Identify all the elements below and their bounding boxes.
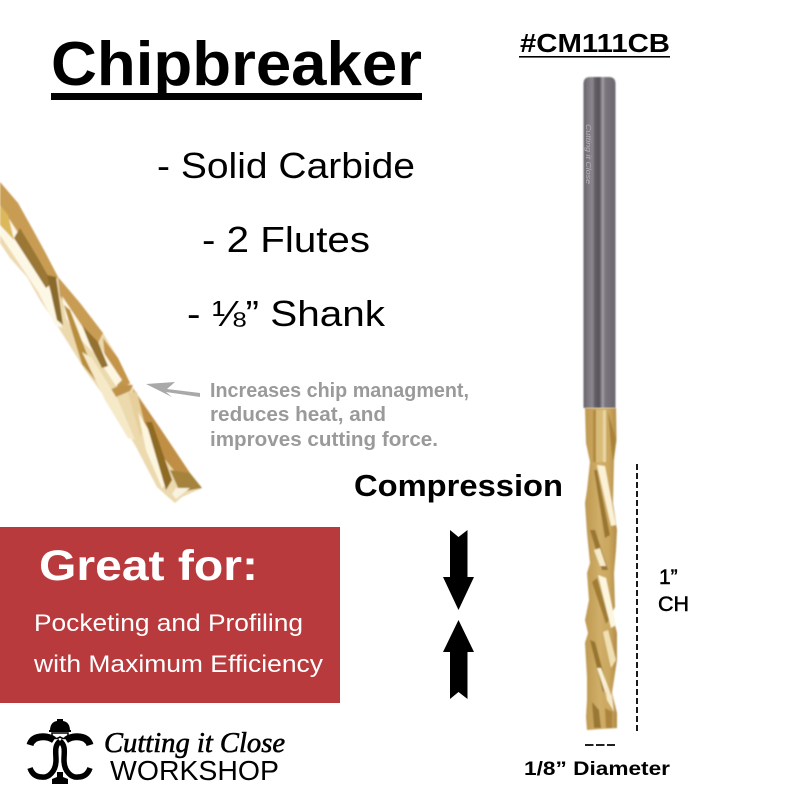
compression heading: Compression [354, 468, 563, 503]
product code: #CM111CB [520, 28, 670, 58]
cutting height label [658, 566, 689, 616]
compression arrows [443, 530, 474, 699]
logo script text: Cutting it Close [104, 727, 285, 759]
logo: Cutting it Close Workshop [30, 719, 285, 786]
callout text: Increases chip managment, [210, 380, 469, 402]
feature list: - Solid Carbide [157, 145, 415, 186]
diameter dashes [585, 744, 615, 746]
feature list: - ⅛” Shank [187, 293, 386, 334]
logo workshop text: WORKSHOP [110, 755, 279, 786]
feature list [157, 145, 415, 334]
panel text: with Maximum Efficiency [33, 651, 323, 678]
callout text: reduces heat, and [210, 404, 386, 426]
panel: great for [0, 527, 340, 703]
panel text: Pocketing and Profiling [34, 610, 303, 637]
callout arrow [146, 382, 200, 397]
logo icon [30, 719, 90, 784]
callout text: improves cutting force. [210, 429, 438, 451]
bit flutes [585, 408, 617, 730]
vertical drill bit [584, 77, 617, 730]
panel heading: Great for: [39, 542, 258, 590]
cutting height label: 1” [659, 566, 678, 589]
title: Chipbreaker: Chipbreaker [51, 30, 422, 99]
shank engraving: Cutting it Close [584, 124, 591, 184]
arrow up [443, 620, 474, 699]
arrow down [443, 530, 474, 610]
diameter label: 1/8” Diameter [524, 759, 671, 780]
feature list: - 2 Flutes [202, 219, 370, 260]
panel text [33, 610, 323, 678]
cutting height label: CH [658, 593, 689, 616]
cutting height dashed line [636, 464, 638, 732]
bit shank [584, 77, 616, 408]
callout text [210, 380, 469, 451]
angled drill bit photo [0, 182, 202, 503]
